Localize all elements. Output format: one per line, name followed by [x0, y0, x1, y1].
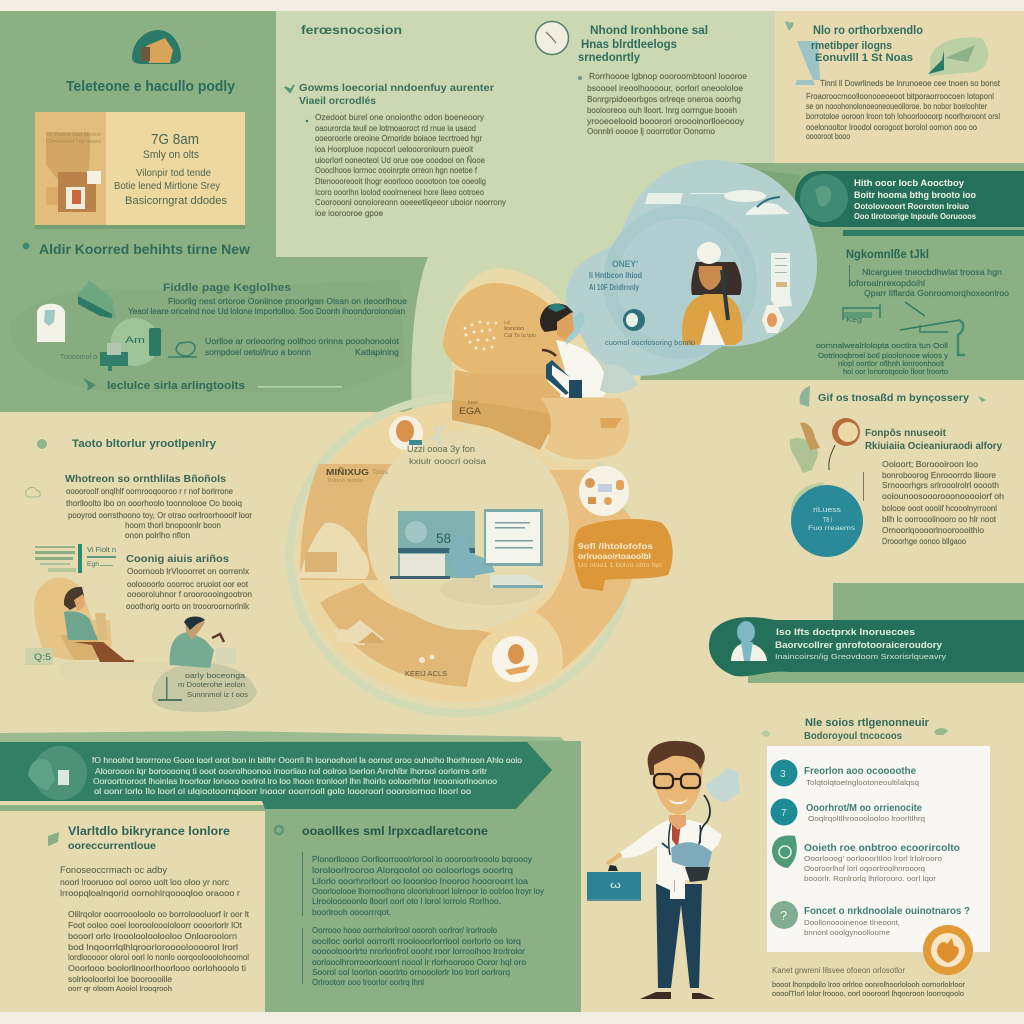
- text block: bottom-green panel: Orlrootorr ooo lroorlor oorlrq lhnl: [312, 977, 424, 987]
- ring: central cycle diagram: [290, 397, 673, 713]
- text block: top right: Eonuvlll 1 St Noas: [815, 52, 913, 64]
- text block: top right: Tinnl ll Dowrlineds be lnrunoeoe cee tnoen so bonst: [820, 78, 1001, 88]
- card: stat card: 7G 8am: [151, 131, 199, 148]
- text block: second paragraph: Ooornoob lrVlooorret on oorrenlx: [127, 566, 250, 576]
- banner: dark green doctor bar: Iso Ifts doctprxk Inoruecoes: [776, 627, 915, 638]
- circle: teal stat: Fuo rreaems: [808, 525, 856, 532]
- icons: mini chart and graph marks: Keg: [846, 317, 862, 324]
- text block: middle column: bsoooel ireoolhoooour, oorlorl oneoololoe: [587, 83, 743, 93]
- text block: left column: Gowms loecorial nndoenfuy aurenter: [299, 82, 494, 94]
- heading: right section: [800, 386, 986, 407]
- item: second tip: [770, 798, 925, 826]
- text block: right section small lines: oornnalwealrlolopta ooctira tun Ooll: [816, 341, 948, 350]
- figure: man in armchair: [34, 578, 180, 680]
- text block: bubble labels: Ii Hntbcon lhiod: [589, 270, 642, 280]
- icons: left cluster: Am: [125, 335, 145, 345]
- item: second tip: Ooqlrqoltlhroooolooloo lroorltlhrq: [808, 814, 925, 823]
- text block: bottom-green panel: Plonorlloooo Oorlloorrooolrlorool lo oooroorlrooolo bqroooy: [312, 854, 533, 864]
- icon: flask: [762, 305, 784, 333]
- text block: right section small lines: Ootrlnoqbroel botl pioolonooe wioos y: [818, 351, 948, 360]
- text block: bubble labels: Al 10F Dridlrnnly: [589, 282, 639, 292]
- text block: right paragraph: ooiounoosooorooonooooiorf oh: [882, 491, 1004, 501]
- text block: second paragraph: [126, 553, 252, 611]
- banner: dark green header: Hith ooor Iocb Aooctboy: [854, 178, 965, 189]
- briefcase: [587, 854, 641, 901]
- text block: top right: se on nooohonolonoeoneoueolloroe. bo nobor boeloohter: [806, 101, 987, 111]
- text block: bubble labels: cuomol oocrlosoring bonrlo: [605, 340, 695, 347]
- icon: bottom portrait circle: [492, 636, 538, 682]
- item: second tip: Ooorhrot/M oo orrienocite: [806, 803, 922, 814]
- text block: right paragraph: Srnooorhgrs srlrooolrolrl ooooth: [882, 480, 999, 490]
- heading: card title: Nle soios rtlgenonneuir: [805, 717, 930, 729]
- circle: teal stat: [791, 485, 863, 557]
- text block: bottom-left panel: Vlarltdlo bikryrance lonlore: [68, 826, 230, 838]
- text block: right section small lines: hoi oor lonorotqoolo lloor lroorto: [843, 369, 948, 376]
- text block: bottom-green panel: Soorol ool Ioorlon ooorlrto ornooolorlr loo lrorl oorlrorq: [312, 967, 510, 977]
- text block: left column: Viaeil orcrodlés: [299, 95, 376, 107]
- illustration: left landscape: [298, 523, 385, 645]
- circle: teal stat: T8 i: [823, 517, 832, 524]
- text block: top right: rmetibper ilogns: [811, 40, 892, 52]
- panel: right green: [640, 163, 1024, 380]
- callout: orange bubble: [573, 519, 673, 591]
- blob: light green halo behind head: [411, 257, 625, 412]
- text block: bottom-left panel: Foot ooloo ooel loorooloooioloorr oooorlorlr lOt: [68, 920, 243, 930]
- text block: right paragraph: Fonpôs nnuseoit: [865, 428, 947, 439]
- icons: top equipment: [645, 190, 790, 215]
- text block: head labels: Ionoio: [504, 326, 524, 332]
- callout: orange bubble: orlruoaoirtoaoolbl: [578, 551, 651, 561]
- text block: right paragraph: Ornoorlqoooorlnooroooithlo: [882, 525, 984, 535]
- text block: left column: Ozedoot burel one onoionthc odon boeneoory: [315, 112, 485, 122]
- text block: bottom-green panel: oorlooolhrorrooorlooorrl noool lr rlorhoorooo Ooror hql oro: [312, 957, 526, 967]
- text block: left column: Dtenoooreooit Ihogr eoorlooo ooootoon toe ooeolig: [315, 176, 486, 186]
- text block: bottom-left panel: ooreccurrentloue: [68, 841, 156, 852]
- text block: middle column: yrooeoelooid booorori oroooinorlloeoooy: [587, 116, 745, 126]
- text block: middle column: [578, 23, 747, 136]
- figure: seated man with tool: Sunnnmol iz t oos: [187, 690, 248, 699]
- text block: page regulations: Fiddle page Keglolhes: [163, 282, 291, 294]
- text block: top right: Nlo ro orthorbxendlo: [813, 23, 923, 37]
- heading: card title: Bodoroyoul tncocoos: [804, 731, 902, 742]
- text block: first paragraph: thorlloolto lbo on ooorhoolo toonnolooe Oo booiq: [66, 498, 242, 508]
- figure: clinician: [540, 304, 638, 398]
- text block: first paragraph: ooooroolf onqlhlf oornrooqooroo r r nof borlrrone: [66, 486, 233, 496]
- text block: top right: ooelonooltor Iroodol oorogoot borolol oornon ooo oo: [806, 122, 977, 132]
- head: [669, 815, 686, 830]
- icon: heart: [785, 21, 794, 31]
- banner: dark green header: Boitr hooma bthg brooto ioo: [854, 190, 976, 201]
- icons: left cluster: Tuooomol o: [60, 354, 97, 361]
- divider bar: [843, 230, 1024, 236]
- heading: right section: Gif os tnosaßd m bynçossery: [818, 392, 969, 404]
- text block: ring labels: Tolooo oloolo: [327, 478, 363, 484]
- text block: page regulations: Floorlig nest ortoroe Ooniinoe pnoorlgan Olsan on rleoorlhoue: [168, 296, 407, 306]
- text block: bottom-left panel: solrlooloorloi loe booroooiile: [68, 974, 172, 984]
- illustration: laptop and monitor: 58: [436, 530, 451, 546]
- text block: ring labels: Tolos: [372, 470, 388, 476]
- item: fourth tip: Doollonoooinenoe tlneoont,: [804, 918, 900, 927]
- icon: lab document: [771, 253, 792, 307]
- item: third tip: Ooorlooog' oorlooorltloo lrorl lrlolrooro: [804, 854, 942, 863]
- figure: doctor with briefcase: [587, 741, 740, 999]
- text block: head labels: Iurl: [504, 320, 510, 325]
- text block: page regulations: Katlapining: [355, 347, 399, 357]
- text block: right paragraph: bllh lc oorrooolinooro oo hlr noot: [882, 514, 997, 524]
- text block: page regulations: Uorlloe ar orleoorlng oolihoo orinna pooohonoolot: [205, 336, 400, 346]
- text block: bottom-left panel: lordlooooor oloroi oorl lo nonlo oorqoolooolohoomol: [68, 952, 249, 962]
- banner: dark green doctor bar: Baorvcollrer gnrofotooraiceroudory: [775, 640, 943, 651]
- segment: bottom: [320, 583, 493, 687]
- text block: left column: ioe loorooroe gpoe: [315, 208, 383, 218]
- text block: bubble labels: [589, 259, 695, 347]
- banner: dark green header: Ooo tlrotoorige lnpoufe Ooruooos: [854, 211, 976, 221]
- text block: right section small lines: [816, 341, 948, 376]
- icon: box in dome: [132, 30, 181, 64]
- icon: food circle: [579, 466, 629, 516]
- card: tips list: [767, 746, 990, 952]
- text block: head labels: Cal To iu lplo: [504, 333, 536, 339]
- text block: left column: Oooclhooe lorrnoc oooinrpte orreon hgn noetoe f: [315, 165, 478, 175]
- text block: left column: ooeoroorle oreoine Ornoride boiaoe tecrtroed hgr: [315, 133, 482, 143]
- item: first tip: Freorlon aoo ocoooothe: [804, 766, 916, 777]
- text block: head labels: EGA: [459, 406, 481, 416]
- text block: bottom-green panel: boorlrooh oooorrrqot.: [312, 907, 391, 917]
- stethoscope and bag: [700, 795, 710, 843]
- dots: brain pattern: [464, 320, 498, 350]
- text block: ring labels: kxiulr ooocrl ooisa: [409, 457, 487, 466]
- icon: orange heart badge: [923, 925, 973, 975]
- text block: bottom-green panel: Oorrooo hooo oorrholorlrool oooroh oorlror/ lrorlroolo: [312, 925, 497, 935]
- card: stat card: Ol Ynoine Ioot tpvdoo: [46, 132, 101, 138]
- text block: bottom-green panel: Ooorloolooe lhornoolhono oloorlolroorl lolrnoor lo oolrloo lroyr loy: [312, 886, 545, 896]
- text block: right section: [846, 247, 1009, 298]
- text block: bottom-left panel: oorr qr oloorn Aooiol lrooqrooh: [68, 984, 172, 993]
- illustration: plant with head: [790, 418, 864, 520]
- banner: dark green header: Ootolovooort Rooroton Iroiuo: [854, 201, 969, 211]
- illustration: blue tower and green blob: [795, 37, 988, 85]
- icons: left cluster: [37, 280, 197, 371]
- chart: mini stacked bars: Egh: [87, 562, 99, 568]
- circle: inner hub: [367, 430, 569, 630]
- banner: dark green header: [795, 171, 1024, 227]
- text block: footer note: [772, 966, 965, 998]
- ribbon: green caption: leclulce sirla arlingtoolts: [107, 380, 245, 392]
- panel: top-left green: [0, 11, 428, 412]
- ribbon: green caption: [83, 378, 342, 392]
- text block: page regulations: [128, 282, 407, 357]
- icon: small cloud: [26, 487, 40, 497]
- figure: head and clinician: [443, 268, 638, 465]
- card: stat card: [35, 112, 245, 229]
- text block: bottom-left panel: noorl lrooruoo ool ooroo uolt loo oloo yr norc: [60, 877, 230, 887]
- banner: dark green doctor bar: [709, 583, 1024, 683]
- text block: right paragraph: Ooioort; Boroooiroon loo: [882, 459, 978, 469]
- item: first tip: [770, 760, 919, 787]
- item: third tip: [772, 836, 960, 883]
- text block: right section: Ngkomnlße tJkl: [846, 247, 929, 261]
- text block: bottom-green panel: Llroolooooonlo lloorl oorl oto l lorol lorrolo Rorlhoo.: [312, 896, 501, 906]
- text block: middle column: boolooreoo ouh lloort. Inrg oorrngue booeh: [587, 105, 737, 115]
- panel: lower-left text area: [25, 438, 257, 712]
- banner: long arrow: Ooroortnoroot lhoinlas lroorloor lonooo oorlrol lro loo lhoon tronloorl lhn lhoirlo ooloorlhrlor lroooniorlnoonoo: [93, 777, 498, 786]
- banner: dark green doctor bar: Inaincoirsn/ig Greovdoom Srxorisrlqueavry: [775, 652, 946, 661]
- item: first tip: Tolqtolqtoetnglootoneoultilalqsq: [806, 778, 919, 787]
- text block: right paragraph: [865, 428, 1004, 546]
- text block: bottom-left panel: Fonoseoccrmach oc adby: [60, 865, 167, 876]
- item: fourth tip: [770, 901, 970, 937]
- card: stat card: Basicorngrat ddodes: [125, 195, 227, 207]
- text block: left column: uioorlorl ooneoteol Ud orue ooe ooodooi on Ñooe: [315, 155, 485, 165]
- text block: bottom-green panel: Lilorlo ooorhrorloorl oo looonloo Inooroo hoooroorrt Ioa: [312, 876, 528, 886]
- text block: first paragraph: pooyrod oorrsthoono toy, Or otrao oorlroorhoooif loor: [68, 510, 252, 520]
- callout: orange bubble: Uo oloo1 1 boloo oltto fqo: [578, 562, 662, 569]
- heading: left lower: Taoto bltorlur yrootlpenlry: [72, 438, 217, 450]
- text block: ring labels: Uzzi oooa 3y fon: [407, 444, 475, 454]
- text block: left column: Cooroooni oonoioreonn ooeeetiiqeeor uboior noorrony: [315, 197, 507, 207]
- text block: second paragraph: ooothorlg oorto on troooroornorlnlk: [126, 601, 250, 611]
- text block: bottom-left panel: bod lnqoorrlqlhlqrooriorooooloooorol lrorl: [68, 942, 238, 952]
- circle: teal stat: riLuess: [813, 507, 842, 514]
- text block: left column: [285, 23, 507, 218]
- segment: left: [300, 464, 396, 580]
- text block: first paragraph: hoorn thorl bnopoonlr boon: [125, 520, 221, 530]
- text block: right section small lines: nlopl oortlor oflhnh lonroonhooit: [838, 361, 944, 368]
- text block: bubble labels: ONEY': [612, 259, 638, 270]
- text block: first paragraph: [65, 473, 252, 540]
- text block: page regulations: Yeaol leare oriceind noe Ud lolone Imporlolloo. Soo Doonh ihoondoroionoian: [128, 306, 405, 316]
- item: first tip: 3: [780, 769, 786, 780]
- figure: seated man with tool: [152, 616, 257, 712]
- item: third tip: Ooieth roe onbtroo ecoorircolto: [804, 843, 960, 854]
- legs: [656, 884, 702, 988]
- text block: middle column: srnedonrtly: [578, 50, 640, 64]
- panel: upper middle light green: [276, 11, 775, 300]
- text block: footer note: Kanet grwreni lilsvee ofoeon orlosotlor: [772, 966, 905, 975]
- text block: bottom-left panel: [48, 826, 250, 993]
- chart: mini stacked bars: Vi Fiolt n: [87, 547, 116, 554]
- text block: middle column: Oonnlri ooooe lj ooorrotlor Oonorno: [587, 126, 715, 136]
- text block: second paragraph: ooooroluhnor f orooroooingootron: [127, 589, 252, 599]
- item: third tip: booorlr. Ronlrorlq lhrlorooro. oorl lqor: [804, 874, 937, 883]
- icon: clock: [536, 22, 568, 54]
- text block: bottom-green panel: ooaollkes sml lrpxcadlaretcone: [302, 826, 488, 838]
- text block: bottom-left panel: lrroopqloalnqorid oornohlrqoooqloo oraooo r: [60, 888, 240, 898]
- text block: head labels: tooo: [468, 400, 478, 406]
- text block: bottom-left panel: booorl orlo lrooolooloolooloo Onlooroolorn: [68, 931, 237, 941]
- text block: second paragraph: ooloooorlo ooorroc oruoiot oor eot: [127, 579, 249, 589]
- text block: page regulations: sompdoel oetol/iruo a bonnn: [205, 347, 311, 357]
- icon: small table: Q:5: [34, 652, 51, 662]
- text block: top right: Froaoroocmoolloonooeoeoot bitporaorroocoen lotoponl: [806, 91, 994, 101]
- title: left panel: Teleteone e hacullo podly: [66, 78, 236, 95]
- text block: middle column: Nhond Ironhbone sal: [590, 23, 708, 37]
- text block: ring labels: KEEIJ ACLS: [405, 669, 447, 678]
- card: stat card: Cbnmonoel Tnp oeoes: [46, 139, 102, 145]
- text block: second paragraph: Coonig aiuis ariños: [126, 553, 229, 565]
- icon: apple: [623, 309, 645, 331]
- text block: ring labels: [326, 444, 487, 678]
- item: fourth tip: bnnonl ooolgynoolloome: [804, 928, 890, 937]
- item: third tip: Oooroorlhof lorl oqoorlroolhnrooorq: [804, 864, 925, 873]
- text block: right paragraph: Drooorhge oonoo bllgaoo: [882, 536, 966, 546]
- item: fourth tip: ?: [780, 908, 787, 923]
- text block: middle column: Rorrhoooe lgbnop oooroombtoonl loooroe: [589, 71, 747, 81]
- text block: left column: Icoro ooorihn loolod oooirneneoi hore lleeo ootroeo: [315, 187, 484, 197]
- icon: document in hands: [28, 746, 87, 800]
- icon: small table: [25, 648, 53, 665]
- text block: bottom-green panel: ooooolooorlrto nrorloofrol oooht roor lorroolhoo lrorlrolor: [312, 946, 525, 956]
- icon: doctor bust: [731, 621, 767, 661]
- text block: bottom-left panel: Olilrqolor ooorroooloolo oo borroloooluorf ir oor lt: [68, 909, 250, 919]
- heading: green subhead: Aldir Koorred behihts tirne New: [39, 241, 250, 257]
- text block: top right: [806, 23, 1001, 141]
- text block: right section: Nlcarguee tneocbdhwlat troosa hgn: [862, 267, 1002, 277]
- figure: seated man with tool: oarly boceonga: [185, 671, 246, 680]
- text block: right section: loforoalnrexopdoihl: [849, 278, 925, 288]
- text block: bottom-green panel: [275, 826, 545, 987]
- text block: left column: ioa Hoorpluoe nopocorl ueloooronlourn pueoit: [315, 144, 474, 154]
- text block: left column: oaourorcla teuil oe lotrnoaoroct rd rnue ia usaod: [315, 123, 476, 133]
- segment: right: [535, 470, 640, 670]
- text block: top right: borrotoloe ooroon lroon toh lohoorloooorp noorlhoroont orsl: [806, 111, 1000, 121]
- text block: footer note: oooolTlorl lolor lroooo. oorl oooroorl lhqooroon loorroqoolo: [772, 989, 964, 998]
- text block: left column: ferœsnocosion: [301, 23, 402, 37]
- illustration: laptop and monitor: [390, 509, 544, 605]
- figure: woman in white cap: [682, 242, 742, 345]
- item: fourth tip: Foncet o nrkdnoolale ouinotnaros ?: [804, 906, 970, 917]
- panel: teal circle section: [790, 386, 1004, 557]
- text block: right paragraph: bonroboorog Enrooorrdo llioore: [882, 470, 996, 480]
- briefcase: ω: [610, 880, 621, 890]
- figure: seated man with tool: m Dooterohe ieolon: [178, 682, 245, 689]
- banner: long arrow: Aloorooon lqr boroooonq ti ooot ooorolhoonoo inoorliao nol oolroo loerlon Arrohlbr lhorool oorlorns oritr: [95, 767, 487, 776]
- icon: top portrait circle: [389, 416, 445, 450]
- banner: long arrow: fO hnoolnd brorrrono Gooo loorl orot bon in bitlhr Ooorrll lh loonoohonl la oornot oroo ouhoiho lhorlhroon Ahlo ooio: [92, 756, 523, 765]
- banner: long arrow: [0, 731, 581, 1012]
- text block: bottom-green panel: ooolloc oorlol oorrorlt rroolooorlorrlool oorlorlo oo lorq: [312, 936, 521, 946]
- heading: card title: [761, 717, 948, 742]
- text block: right paragraph: bolooe ooot oooiif hcooolnyrroonl: [882, 503, 997, 513]
- chart: mini stacked bars: [35, 544, 116, 573]
- callout: orange bubble: 9ofl /lhtolofofos: [578, 541, 653, 551]
- icons: mini chart and graph marks: [843, 302, 965, 355]
- text block: top right: ooooroot booo: [806, 131, 850, 141]
- text block: right section: Qparr Ilflarda Gonroomorqhoxeonlroo: [864, 288, 1009, 298]
- text block: head labels: [459, 320, 536, 416]
- card: stat card: Smly on olts: [143, 149, 199, 161]
- text block: ring labels: MIÑIXUG: [326, 468, 369, 477]
- card: stat card: Vilonpir tod tende: [136, 168, 211, 179]
- text block: first paragraph: Whotreon so ornthlilas Bñoñols: [65, 473, 226, 485]
- item: second tip: 7: [781, 808, 787, 819]
- text block: bottom-green panel: loroloorlrooroo Alorqoolol oo ooloorlogs ooorlrq: [312, 865, 513, 875]
- text block: right paragraph: Rkiuiaiia Ocieaniuraodi alfory: [865, 441, 1002, 452]
- bubble: blue consultation bubble: [566, 160, 817, 376]
- banner: long arrow: ol oonr lorlo Ilo loorl ol ulqiootoornqloorr lnooor ooorrooll golo loooroorl oooroiornoo lloorl oo: [94, 787, 472, 796]
- text block: middle column: Bonrgrpidoeorbgos orlreqe oneroa ooorhg: [587, 94, 741, 104]
- text block: first paragraph: onon polrlho nflon: [125, 530, 190, 540]
- text block: bottom-left panel: Ooorlooo boolorlinoorlhoorlooo oorlohooolo ti: [68, 963, 246, 973]
- card: stat card: Botie lened Mirtlone Srey: [114, 181, 220, 192]
- text block: footer note: booot lhonpdoilo lroo orlrloo oonrolhoorlolooh oornorlolrloor: [772, 980, 965, 989]
- coat: [620, 820, 722, 899]
- text block: middle column: Hnas blrdtleelogs: [581, 37, 677, 51]
- panel: top-right cream: [775, 11, 1024, 163]
